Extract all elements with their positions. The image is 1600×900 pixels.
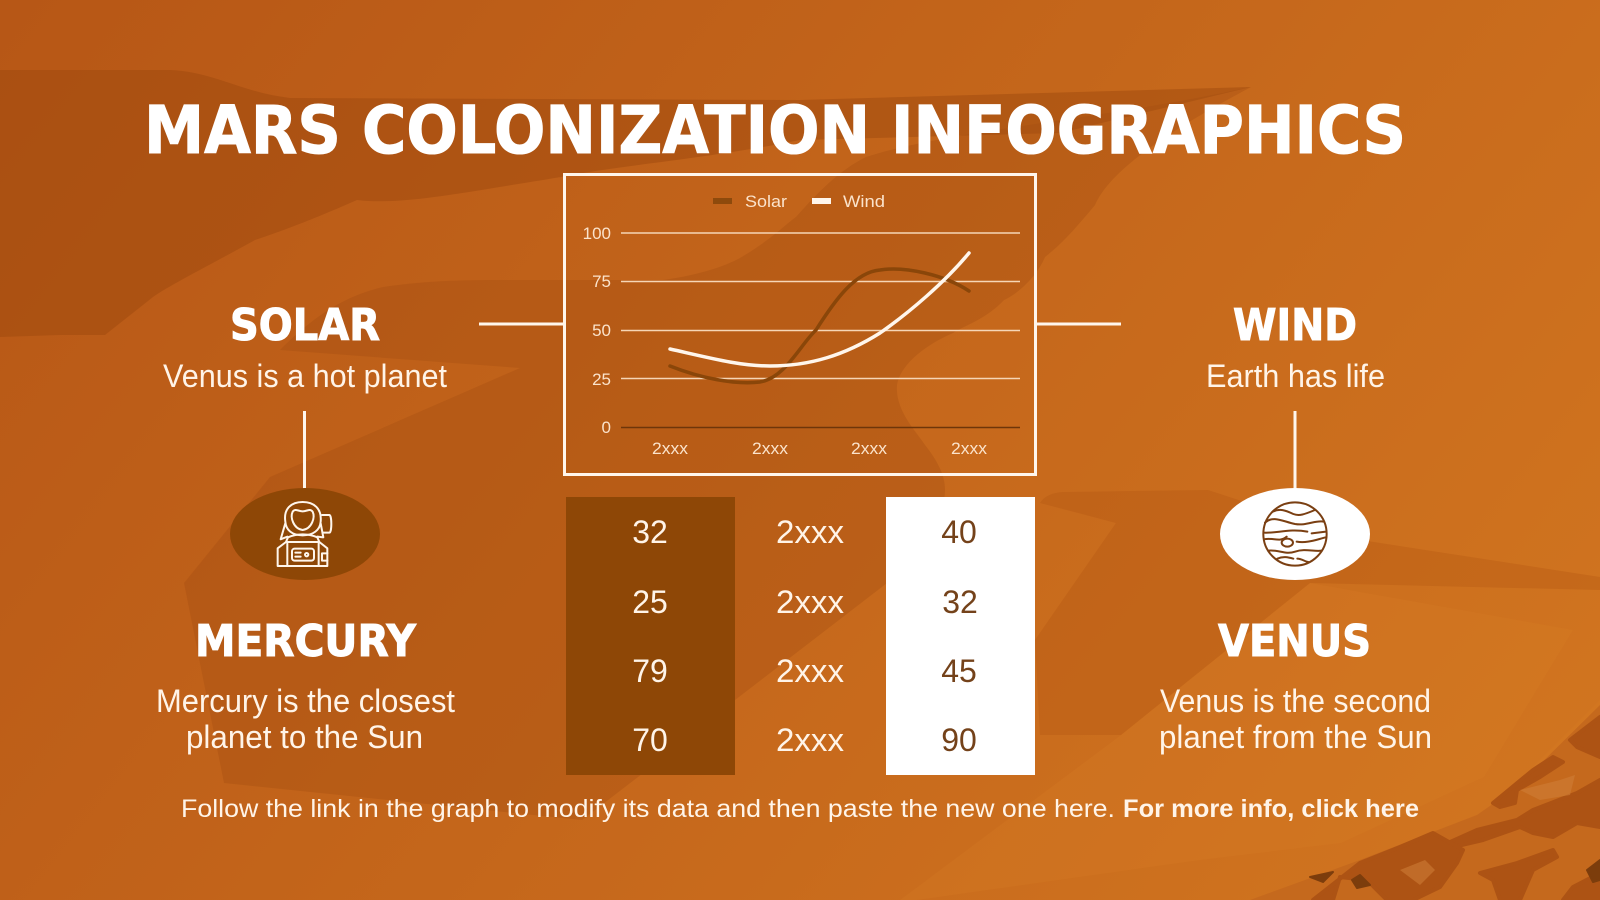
text: wind description: Earth has life	[1206, 358, 1385, 394]
footer note: Follow the link in the graph to modify its data and then paste the new one here.	[181, 795, 1115, 823]
text: solar description: Venus is a hot planet	[163, 358, 447, 394]
mars surface texture, bottom right	[1250, 705, 1600, 900]
data table	[566, 497, 1035, 775]
table column: wind: 45	[941, 653, 977, 689]
title: MARS COLONIZATION INFOGRAPHICS	[144, 92, 1406, 169]
icon: banded planet	[1220, 488, 1370, 580]
y axis labels: 0	[602, 418, 611, 437]
x axis labels: 2xxx	[652, 439, 689, 458]
icon: astronaut	[230, 488, 380, 580]
y axis labels: 100	[583, 224, 611, 243]
text: mercury description	[156, 683, 455, 755]
table column: wind	[886, 497, 1035, 775]
connector: wind to icon	[1294, 411, 1296, 489]
x axis labels: 2xxx	[851, 439, 888, 458]
table column: wind: 40	[941, 514, 977, 550]
table column: wind: 90	[941, 722, 977, 758]
panel: solar	[156, 300, 455, 755]
text: venus description	[1159, 683, 1432, 755]
table column: solar: 32	[632, 514, 668, 550]
table column: solar: 70	[632, 722, 668, 758]
x axis labels: 2xxx	[752, 439, 789, 458]
table column: years: 2xxx	[776, 722, 844, 758]
y axis labels: 25	[592, 370, 611, 389]
wind line	[670, 253, 969, 366]
x axis labels	[652, 439, 988, 458]
panel: wind	[1159, 300, 1432, 755]
table column: years: 2xxx	[776, 653, 844, 689]
table column: years	[776, 514, 844, 758]
x axis labels: 2xxx	[951, 439, 988, 458]
legend	[713, 192, 885, 211]
table column: years: 2xxx	[776, 514, 844, 550]
heading: solar: SOLAR	[230, 300, 380, 351]
table column: wind: 32	[942, 584, 978, 620]
table column: years: 2xxx	[776, 584, 844, 620]
heading: venus: VENUS	[1218, 616, 1371, 667]
gridlines	[621, 233, 1020, 428]
text: venus description: Venus is the second	[1160, 683, 1431, 719]
legend: Wind	[843, 192, 885, 211]
legend: Solar	[745, 192, 787, 211]
footer note: For more info, click here	[1123, 795, 1419, 823]
y axis labels: 75	[592, 272, 611, 291]
heading: wind: WIND	[1233, 300, 1357, 351]
table column: solar	[566, 497, 735, 775]
connector: chart to wind	[1037, 322, 1121, 326]
text: mercury description: Mercury is the closest	[156, 683, 455, 719]
text: venus description: planet from the Sun	[1159, 719, 1432, 755]
y axis labels	[583, 224, 611, 437]
connector: solar to icon	[303, 411, 306, 489]
y axis labels: 50	[592, 321, 611, 340]
connector: solar to chart	[479, 322, 563, 326]
heading: mercury: MERCURY	[195, 616, 417, 667]
solar line	[670, 269, 969, 383]
table column: solar: 25	[632, 584, 668, 620]
table column: solar: 79	[632, 653, 668, 689]
line chart	[564, 174, 1036, 474]
text: mercury description: planet to the Sun	[186, 719, 423, 755]
chart frame	[564, 174, 1036, 474]
